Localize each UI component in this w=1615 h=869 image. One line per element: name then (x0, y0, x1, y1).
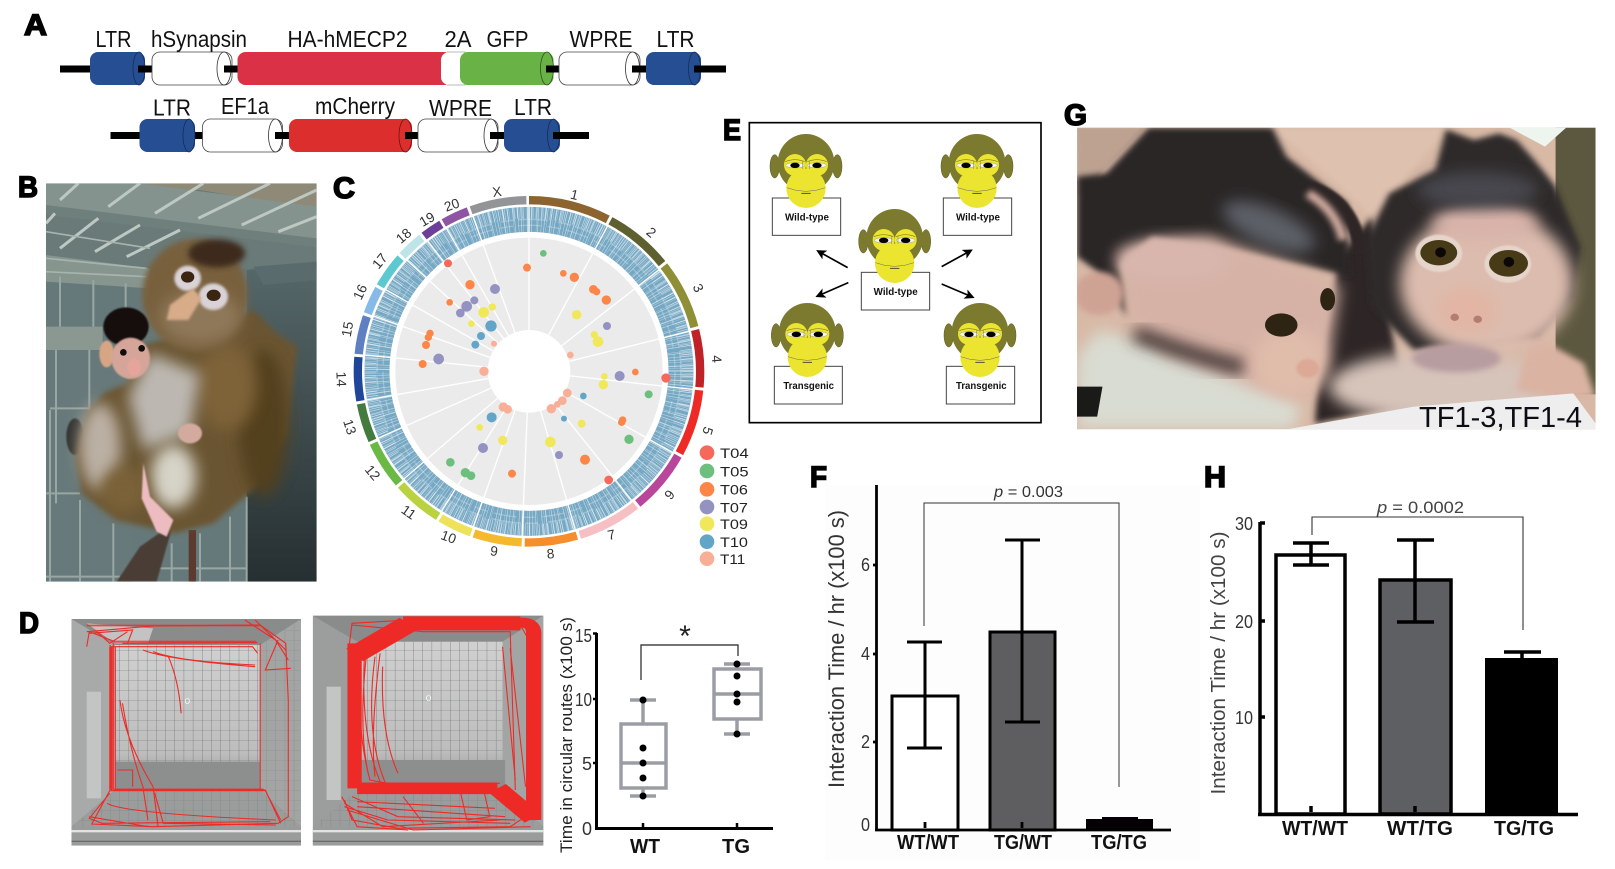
panel G: photo of two infant monkeys (1074, 128, 1596, 434)
circos: chromosome labels: 16 (350, 282, 370, 302)
H: bar WT/WT (1276, 555, 1345, 814)
circos: legend (700, 445, 749, 567)
panel A: upper vector construct: hSynapsin (151, 26, 247, 52)
panel D: box plot of time in circular routes (557, 617, 773, 858)
D: axis ticks (593, 634, 737, 828)
H: tick labels: 30 (1235, 514, 1253, 534)
panel A: lower vector construct: EF1a (221, 93, 269, 119)
circos: chromosome labels: 15 (339, 320, 356, 338)
panel A: lower vector construct: LTR (514, 94, 552, 120)
circos: chromosome labels: 6 (661, 487, 678, 502)
panel D: cage photo with sparse red routes (WT) (71, 619, 301, 846)
circos: chromosome labels: 7 (606, 527, 617, 543)
H: tick labels (1235, 514, 1253, 728)
panel H: bar chart of interaction time (1208, 498, 1578, 840)
D: tick labels: 5 (582, 754, 592, 774)
E: arrows (818, 251, 972, 297)
panel A: upper vector construct: HA-hMECP2 (288, 26, 408, 52)
E: transgenic offspring bottom left (771, 303, 843, 404)
F: significance bracket (924, 503, 1119, 787)
H: p value: p = 0.0002 (1376, 498, 1464, 517)
F: p value: p = 0.003 (993, 484, 1063, 501)
H: tick labels: 10 (1235, 708, 1253, 728)
dark body behind (1315, 217, 1414, 423)
D: asterisk: * (679, 620, 691, 653)
chest and legs (128, 353, 200, 450)
F: error bars (907, 540, 1040, 748)
F: tick labels (861, 555, 870, 835)
F: bar WT/WT (892, 696, 958, 830)
circos: chromosome ring (358, 200, 700, 542)
circos: legend: T06 (720, 483, 748, 498)
E: transgenic offspring bottom left: Transgenic (783, 381, 835, 392)
panel D label: D (19, 607, 39, 640)
circos: chromosome labels: 13 (340, 417, 359, 436)
panel C: circos plot (333, 184, 749, 567)
F: tick labels: 6 (861, 555, 870, 575)
D: WT box (621, 700, 666, 796)
D: x labels (630, 836, 750, 858)
E: wild-type offspring top right (941, 134, 1013, 235)
D: x labels: WT (630, 836, 660, 858)
F: x labels: TG/TG (1091, 832, 1147, 854)
F: x labels: WT/WT (897, 832, 959, 854)
H: x labels: WT/WT (1282, 818, 1348, 840)
circos: chromosome labels: 2 (643, 224, 659, 241)
circos: chromosome labels: 14 (333, 371, 349, 387)
H: bar WT/TG (1380, 580, 1451, 814)
panel A: lower vector construct (110, 93, 589, 152)
panel B label: B (18, 171, 38, 204)
circos: chromosome labels: 19 (417, 209, 437, 230)
panel A: lower vector construct: WPRE (429, 95, 492, 121)
F: tick labels: 2 (861, 732, 870, 752)
circos: legend: T05 (720, 464, 749, 479)
right monkey (1329, 352, 1556, 422)
panel A: upper vector construct: WPRE (570, 26, 632, 52)
adult head (142, 239, 248, 351)
circos: chromosome labels: 12 (362, 462, 383, 483)
circos: chromosome labels: 3 (690, 281, 706, 295)
circos: chromosome labels: 4 (709, 355, 724, 364)
F: x labels: TG/WT (994, 832, 1052, 854)
D: tick labels: 0 (582, 819, 592, 839)
circos: chromosome labels: 17 (369, 250, 391, 272)
panel A label: A (24, 9, 47, 42)
H: significance bracket (1312, 517, 1523, 630)
left monkey (1077, 330, 1301, 429)
panel A: upper vector construct (60, 26, 726, 85)
panel H label: H (1204, 461, 1226, 494)
circos: chromosome labels: 20 (442, 195, 462, 215)
E: wild-type subject centre (859, 209, 931, 310)
circos: chromosome labels: 5 (699, 425, 716, 437)
F: x labels (897, 832, 1147, 854)
panel G label: G (1064, 99, 1087, 132)
panel C label: C (333, 172, 355, 205)
H: y-axis label: Interaction Time / hr (x100 s) (1208, 532, 1230, 794)
F: y-axis label: Interaction Time / hr (x100 s) (824, 510, 849, 788)
D: TG box (714, 664, 761, 734)
D: tick labels (575, 626, 592, 839)
H: axes (1258, 522, 1578, 815)
infant (103, 307, 149, 346)
E: wild-type subject centre: Wild-type (874, 287, 918, 298)
G: caption: TF1-3,TF1-4 (1419, 402, 1582, 434)
circos: legend: T10 (720, 535, 748, 550)
F: tick labels: 0 (861, 815, 870, 835)
circos: chromosome labels: 1 (569, 187, 580, 203)
adult body (75, 310, 297, 533)
circos: legend: T09 (720, 517, 748, 532)
panel A: lower vector construct: mCherry (315, 93, 395, 119)
E: transgenic offspring bottom right: Transgenic (956, 381, 1007, 392)
D: axes (595, 633, 773, 830)
panel A: upper vector construct: LTR (96, 26, 132, 52)
circos: legend: T07 (720, 500, 748, 515)
circos: chromosome labels: 9 (489, 543, 499, 559)
D: data points (640, 660, 740, 800)
D: tick labels: 15 (575, 626, 592, 646)
panel A: upper vector construct: GFP (486, 26, 528, 52)
F: axes (873, 485, 1171, 831)
circos: legend: T04 (720, 446, 749, 461)
panel A: lower vector construct: LTR (153, 94, 191, 120)
D: significance bracket (641, 645, 738, 680)
E: transgenic offspring bottom right (944, 303, 1016, 404)
circos: heat track (370, 213, 688, 530)
H: x labels (1282, 818, 1554, 840)
circos: grey sector background (441, 284, 616, 459)
F: bar TG/TG (1086, 817, 1153, 830)
H: error bars (1293, 540, 1541, 660)
circos: chromosome labels: 11 (398, 502, 419, 523)
panel F: bar chart of interaction time (824, 484, 1200, 860)
H: x labels: TG/TG (1494, 818, 1554, 840)
panel D: cage photo with dense red circular routes (TG) (313, 616, 543, 846)
circos: legend: T11 (720, 552, 745, 567)
E: wild-type offspring top left: Wild-type (785, 212, 830, 223)
circos: sector spokes (363, 205, 695, 538)
H: x labels: WT/TG (1387, 818, 1453, 840)
circos: chromosome labels: 10 (439, 527, 459, 547)
panel B: photo of adult monkey holding infant in cage (46, 183, 317, 582)
D: tick labels: 10 (575, 690, 592, 710)
D: y-axis label: Time in circular routes (x100 s) (557, 617, 576, 853)
F: tick labels: 4 (861, 644, 870, 664)
panel A: upper vector construct: 2A (444, 26, 472, 52)
cloth (1287, 393, 1596, 429)
H: tick labels: 20 (1235, 612, 1253, 632)
H: bar TG/TG (1485, 658, 1558, 814)
E: wild-type offspring top right: Wild-type (956, 212, 1001, 223)
circos: chromosome labels (333, 184, 724, 562)
circos: chromosome labels: 8 (546, 546, 555, 562)
panel A: upper vector construct: LTR (656, 26, 694, 52)
panel E: mating diagram (749, 123, 1041, 423)
panel F label: F (810, 461, 827, 494)
E: wild-type offspring top left (770, 134, 842, 235)
circos: chromosome labels: 18 (393, 225, 414, 247)
F: bar TG/WT (990, 632, 1055, 830)
circos: sample dots (419, 250, 671, 484)
panel E label: E (723, 114, 741, 147)
circos: chromosome labels: X (491, 184, 503, 200)
D: x labels: TG (722, 836, 750, 858)
